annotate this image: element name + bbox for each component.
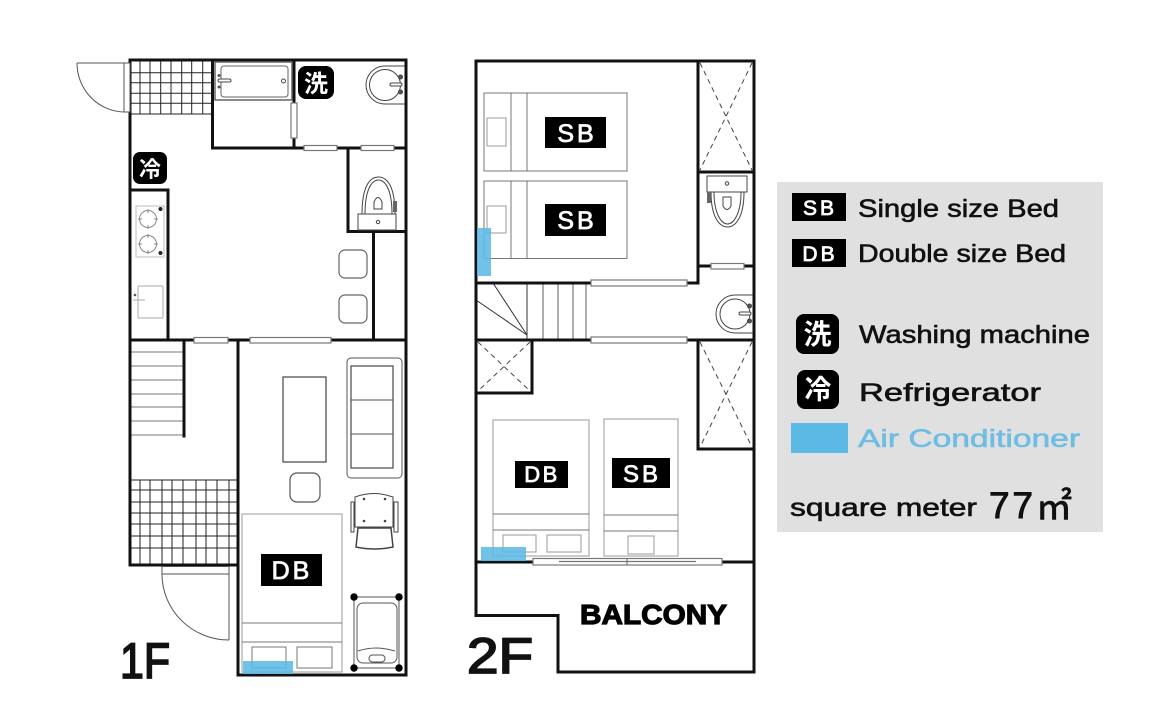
legend: washing machine: 洗 — [803, 319, 832, 350]
entry door upper — [77, 63, 130, 112]
legend: refrigerator: 冷 — [804, 375, 832, 405]
legend: floor area — [790, 485, 1072, 527]
entry door lower — [162, 566, 229, 640]
stool in living room — [290, 473, 320, 502]
label: balcony: BALCONY — [580, 599, 727, 630]
tile floor: lower entry — [130, 480, 238, 565]
bed: double 2F — [493, 420, 589, 556]
panel: 2F floor plan — [467, 61, 754, 684]
legend: double bed — [792, 239, 1066, 268]
bed 1F double — [242, 514, 342, 672]
legend background — [777, 182, 1103, 532]
bed: single 2F lower — [604, 419, 678, 556]
legend: air conditioner: Air Conditioner — [858, 425, 1080, 453]
heading: 1F: 1F — [120, 633, 170, 689]
sofa — [347, 358, 402, 478]
legend: air conditioner — [791, 423, 1080, 453]
air conditioner 2F lower — [481, 547, 526, 561]
bed: single upper — [484, 93, 627, 171]
label: SB second: SB — [557, 207, 597, 235]
windows and sliding doors 1F — [194, 103, 394, 343]
icon: toilet 1F — [358, 177, 397, 230]
icon: gas stove — [136, 206, 164, 257]
legend: single bed: SB — [803, 197, 837, 220]
legend: washing machine: Washing machine — [859, 321, 1090, 349]
icon: refrigerator badge: 冷 — [139, 157, 161, 182]
icon: wash basin 1F — [366, 66, 404, 104]
legend: refrigerator — [797, 370, 1041, 409]
icon: refrigerator badge — [133, 152, 167, 184]
heading: 2F: 2F — [467, 628, 533, 684]
label: DB 2F — [515, 461, 568, 488]
label: SB 2F lower: SB — [623, 461, 661, 488]
label: SB upper — [545, 117, 606, 148]
label: SB upper: SB — [557, 120, 597, 148]
walls 2F — [476, 61, 754, 672]
closets with dashed crosses — [478, 63, 752, 447]
walls 1F — [130, 60, 406, 675]
legend: floor area: 77 — [989, 485, 1033, 526]
coffee table — [283, 377, 326, 462]
stools in kitchen — [339, 250, 367, 323]
label: SB second — [545, 204, 606, 236]
legend: double bed: DB — [802, 243, 838, 266]
panel: 1F floor plan — [77, 60, 406, 689]
legend: single bed — [792, 193, 1059, 223]
tile floor: upper entry — [130, 60, 212, 114]
icon: kitchen sink — [133, 286, 163, 318]
icon: wash basin 2F — [716, 295, 753, 333]
bed: single second — [484, 181, 627, 258]
label: DB 1F: DB — [272, 557, 312, 585]
windows and sliding doors 2F — [533, 264, 744, 565]
label: DB 2F: DB — [524, 462, 560, 487]
label: DB 1F — [261, 554, 322, 586]
legend: floor area: square meter — [790, 494, 977, 522]
panel: legend — [777, 182, 1103, 532]
icon: washing machine badge — [298, 66, 334, 99]
icon: bathtub — [215, 62, 292, 100]
icon: wheeled seat — [350, 593, 403, 672]
stairs 1F — [130, 352, 184, 435]
legend: floor area: ㎡ — [1036, 486, 1072, 527]
legend: single bed: Single size Bed — [858, 195, 1059, 223]
stairs 2F — [476, 283, 586, 340]
air conditioner 2F upper — [477, 228, 491, 276]
legend: refrigerator: Refrigerator — [859, 379, 1041, 407]
legend: washing machine — [796, 314, 1090, 354]
label: SB 2F lower — [612, 458, 670, 488]
icon: washing machine badge: 洗 — [304, 71, 328, 98]
legend: double bed: Double size Bed — [858, 240, 1066, 268]
icon: toilet 2F — [707, 176, 747, 227]
air conditioner 1F — [243, 661, 293, 674]
armchair — [351, 494, 398, 549]
